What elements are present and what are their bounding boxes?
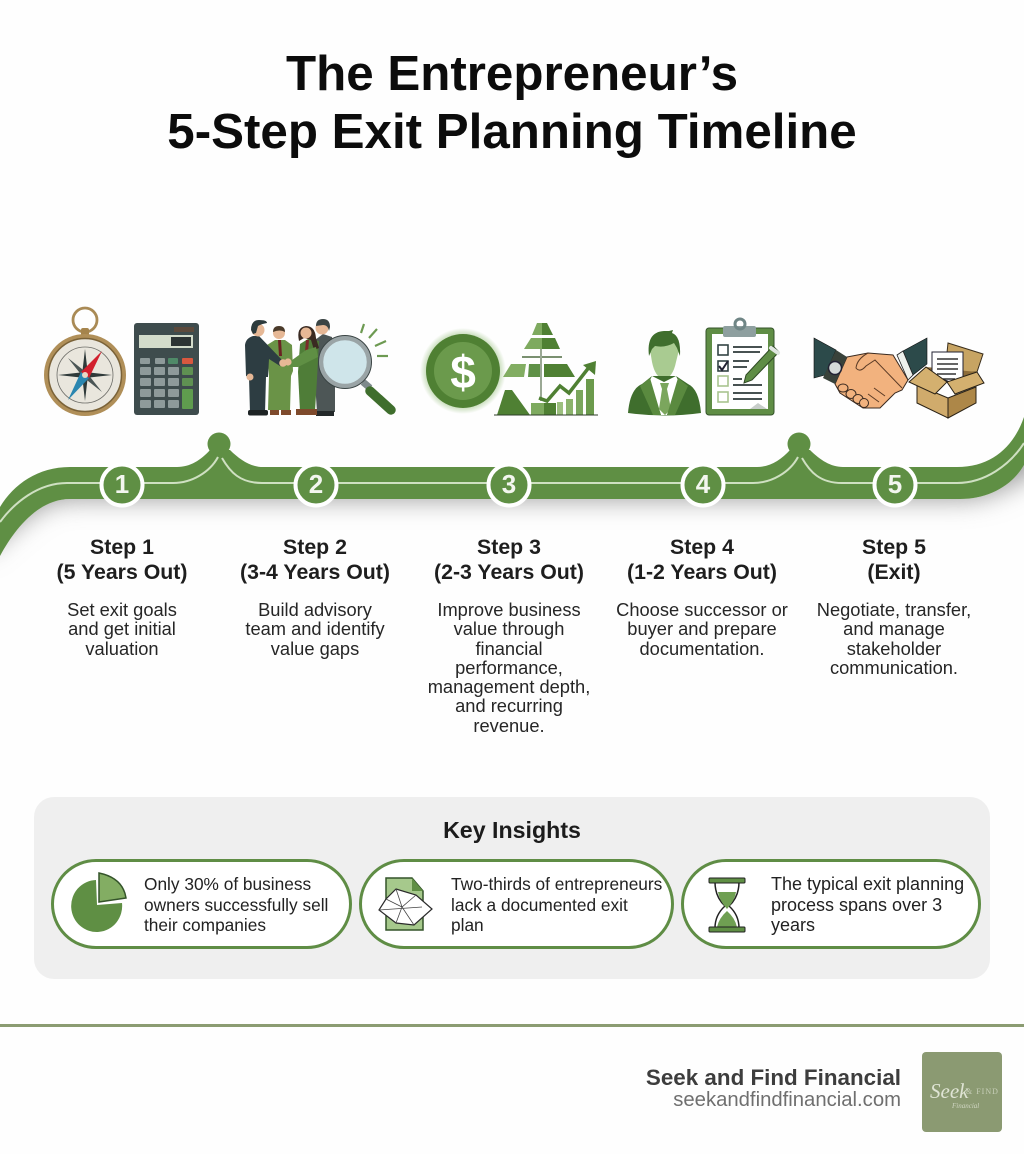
insight 1 text	[144, 874, 328, 935]
footer website: seekandfindfinancial.com	[673, 1089, 901, 1111]
step 3 description: management depth,	[428, 676, 590, 697]
step 3 description: Improve business	[437, 599, 581, 620]
step 2 heading	[240, 535, 390, 584]
step 5 heading: Step 5	[862, 535, 926, 559]
step 4 description: Choose successor or	[616, 599, 788, 620]
step 2 description: Build advisory	[258, 599, 372, 620]
step 5 description: and manage	[843, 618, 945, 639]
step number 4	[680, 466, 726, 508]
step number 5: 5	[888, 469, 902, 499]
green band	[0, 417, 1024, 556]
step 1 description	[67, 599, 177, 659]
step 4 description: documentation.	[639, 638, 764, 659]
insight 1 text: Only 30% of business	[144, 874, 311, 894]
icon: successor silhouette	[628, 330, 701, 416]
panel: key insights	[34, 797, 990, 979]
step 1 description: and get initial	[68, 618, 176, 639]
insight 1	[51, 859, 352, 949]
icon: advisory team and magnifier	[245, 319, 396, 416]
footer rule	[0, 1024, 1024, 1027]
step 2 description: team and identify	[245, 618, 385, 639]
insight 1 text: their companies	[144, 915, 266, 935]
step 2 heading: Step 2	[283, 535, 347, 559]
icon: crumpled plan	[378, 877, 433, 931]
step 4 description	[616, 599, 788, 659]
icon: calculator	[134, 323, 199, 415]
insight 3 text: process spans over 3	[771, 894, 942, 914]
step 2 heading: (3-4 Years Out)	[240, 560, 390, 584]
step 3 description: revenue.	[473, 715, 545, 736]
insight 3 text: years	[771, 915, 815, 935]
step number 4: 4	[695, 469, 710, 499]
step 3 description	[428, 599, 590, 736]
step 3 description: performance,	[455, 657, 563, 678]
step 3 heading	[434, 535, 584, 584]
logo: Seek	[930, 1079, 968, 1103]
icon: dollar coin: $	[450, 346, 476, 398]
icon: compass	[44, 306, 126, 416]
icon: checklist clipboard	[706, 318, 780, 416]
logo	[922, 1052, 1002, 1132]
step number 3	[486, 466, 532, 508]
icon: value pyramid and growth chart	[494, 323, 598, 416]
step 1 heading: Step 1	[90, 535, 154, 559]
centre line	[0, 443, 1024, 522]
insight 3 text	[771, 874, 964, 935]
step 1 heading: (5 Years Out)	[56, 560, 188, 584]
step 3 heading: Step 3	[477, 535, 541, 559]
step 5 heading: (Exit)	[867, 560, 921, 584]
step 3 description: value through	[454, 618, 564, 639]
title: The Entrepreneur’s	[286, 46, 738, 101]
step 1 description: valuation	[85, 638, 159, 659]
logo: & FIND	[966, 1087, 999, 1096]
step 3 heading: (2-3 Years Out)	[434, 560, 584, 584]
icon: handshake	[814, 338, 928, 408]
milestone marker 1	[208, 432, 230, 456]
step 3 description: financial	[475, 638, 543, 659]
step 4 heading	[627, 535, 777, 584]
step 3 description: and recurring	[455, 695, 563, 716]
step number 1: 1	[114, 469, 129, 499]
step 4 description: buyer and prepare	[627, 618, 777, 639]
logo: Financial	[952, 1102, 979, 1110]
icon: document box	[908, 342, 985, 419]
icon: hourglass	[708, 878, 746, 932]
heading: key insights: Key Insights	[443, 817, 581, 843]
title	[167, 46, 857, 159]
step number 2: 2	[309, 469, 323, 499]
step 4 heading: Step 4	[670, 535, 734, 559]
insight 2 text: plan	[451, 915, 484, 935]
step 2 description	[245, 599, 385, 659]
title: 5-Step Exit Planning Timeline	[167, 104, 857, 159]
footer brand name: Seek and Find Financial	[646, 1065, 901, 1090]
step number 1	[100, 466, 144, 508]
step 4 heading: (1-2 Years Out)	[627, 560, 777, 584]
insight 2	[359, 859, 674, 949]
insight 3 text: The typical exit planning	[771, 874, 964, 894]
shadow under band	[0, 466, 1024, 559]
step number 2	[294, 466, 338, 508]
insight 1 text: owners successfully sell	[144, 894, 328, 914]
step 5 description: Negotiate, transfer,	[817, 599, 971, 620]
step 5 description: stakeholder	[847, 638, 941, 659]
icon: dollar coin	[421, 329, 505, 413]
milestone marker 2	[788, 432, 810, 456]
step number 5	[872, 466, 918, 508]
insight 2 text	[451, 874, 662, 935]
step 1 heading	[56, 535, 188, 584]
step 2 description: value gaps	[271, 638, 359, 659]
timeline track	[0, 417, 1024, 559]
step 5 description	[817, 599, 971, 678]
step 5 description: communication.	[830, 657, 958, 678]
step 5 heading	[862, 535, 926, 584]
insight 2 text: Two-thirds of entrepreneurs	[451, 874, 662, 894]
step number 3: 3	[502, 469, 516, 499]
step 1 description: Set exit goals	[67, 599, 177, 620]
insight 3	[681, 859, 981, 949]
icon: pie chart	[71, 872, 127, 932]
insight 2 text: lack a documented exit	[451, 894, 628, 914]
